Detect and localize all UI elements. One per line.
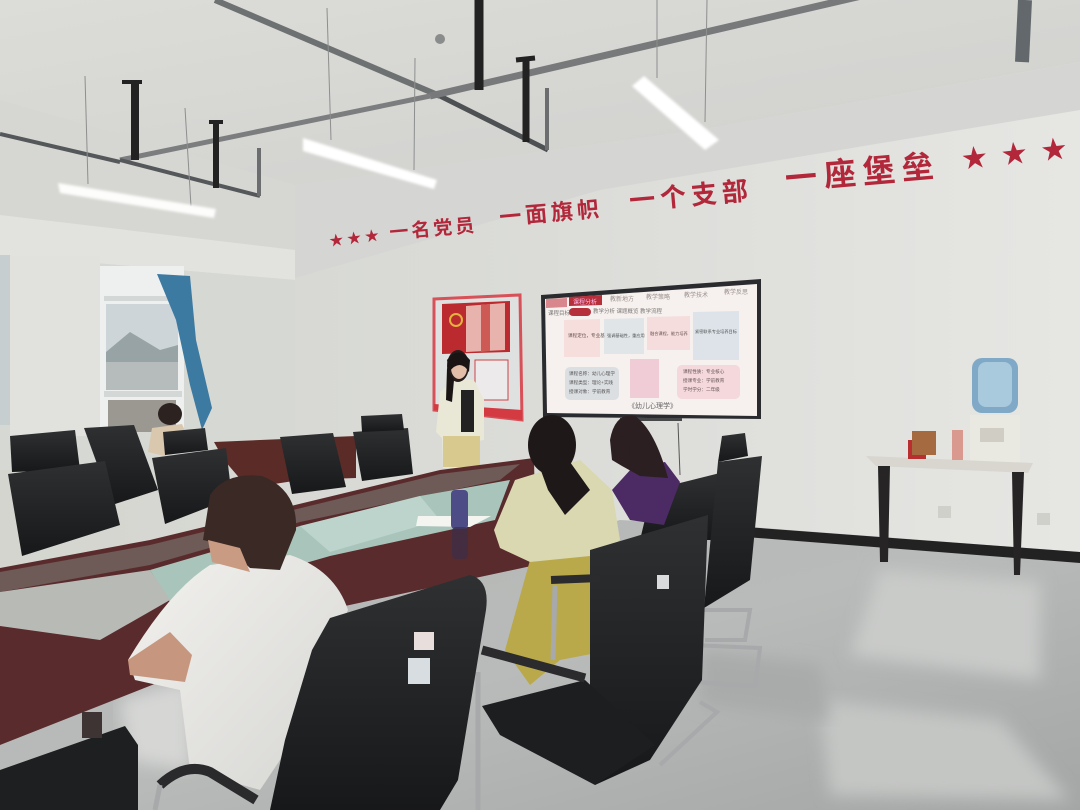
upper right wall band: [295, 62, 1080, 278]
wall screen: 课程定位，专业基: [568, 332, 605, 339]
ceiling soffit on left: [0, 100, 295, 280]
wall sockets: [938, 506, 1050, 525]
wall screen: 强调基础性，重应用: [607, 332, 645, 339]
slogan on wall: ★ ★ ★: [328, 227, 380, 249]
pipes on ceiling: [0, 0, 1025, 196]
wall screen: 融合课程，能力培养: [650, 330, 689, 337]
wall screen: 教学技术: [684, 291, 708, 299]
far wood table: [214, 436, 356, 488]
slogan on wall: ★★★: [961, 134, 1080, 174]
soffit lower band: [0, 215, 295, 280]
slogan on wall: 一名党员: [389, 214, 478, 244]
wall screen: 授课专业：学前教育: [683, 377, 725, 384]
wall screen: 紧密联系专业培养目标: [695, 328, 737, 335]
slogan on wall: 一个支部: [628, 175, 754, 216]
skirting: [746, 527, 1080, 563]
wall screen: 课程类型：理论+实践: [569, 379, 613, 386]
woman in white: [128, 475, 348, 790]
slogan on wall: [328, 134, 1080, 249]
wall pillar: [10, 256, 100, 436]
slogan on wall: 一面旗帜: [498, 196, 604, 230]
party poster: [434, 295, 522, 420]
table leg: [82, 712, 102, 738]
front right chair: [478, 515, 708, 810]
floor: [0, 520, 1080, 810]
conference table: [0, 458, 536, 745]
wall screen: 教学反思: [724, 288, 748, 296]
front chair: [155, 575, 487, 810]
woman in purple: [610, 416, 680, 525]
wall screen: 教学分析 课题概览 教学流程: [593, 307, 663, 315]
wall screen: 授课对象：学前教育: [569, 388, 611, 395]
wall screen: 《幼儿心理学》: [628, 401, 677, 410]
wall screen: 教新地方: [610, 295, 634, 303]
wall screen: 课程性质：专业核心: [683, 368, 725, 375]
bottom left chair: [0, 726, 138, 810]
wall screen: [541, 279, 761, 421]
seated figure at window: [148, 403, 190, 456]
woman in yellow: [494, 415, 620, 685]
ceiling: [0, 0, 1080, 185]
wall screen: 学时学分：二年级: [683, 386, 720, 393]
screen cable: [678, 423, 680, 475]
curtain: [157, 274, 212, 430]
chairs right side: [640, 433, 762, 608]
slogan on wall: 一座堡垒: [783, 148, 942, 197]
speaker: [436, 350, 484, 468]
wall screen: 课程目标: [548, 309, 571, 317]
water cooler and side table: [866, 358, 1033, 575]
window: [0, 255, 184, 432]
back row chairs left: [8, 414, 413, 556]
wall screen: 教学策略: [646, 293, 670, 301]
ceiling lights: [58, 0, 719, 218]
chair base right: [660, 610, 760, 765]
floor reflections: [120, 570, 1070, 800]
wall screen: 课程名称：幼儿心理学: [569, 370, 615, 377]
left recess wall: [0, 255, 295, 470]
wall screen: 课程分析: [573, 298, 597, 306]
